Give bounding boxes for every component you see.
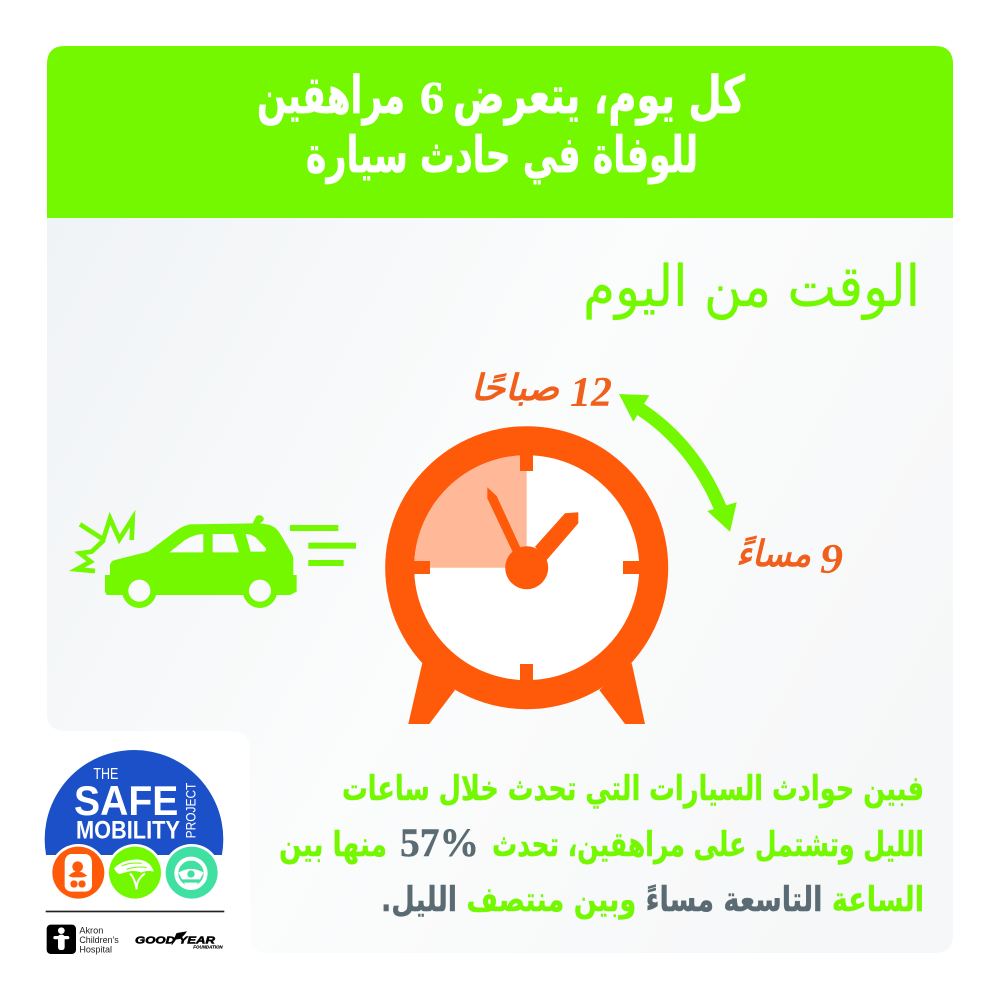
title: كل يوم، يتعرض [453, 66, 746, 126]
label: 12 am [471, 368, 612, 416]
logo: Akron Children's Hospital [47, 925, 119, 955]
logo wordmark: PROJECT [183, 782, 199, 838]
speed lines [290, 525, 356, 566]
impact burst [77, 518, 133, 571]
arrow: 12 am to 9 pm [619, 394, 737, 532]
logo: Goodyear Foundation: FOUNDATION [193, 944, 224, 949]
title: مراهقين [257, 66, 405, 126]
title: للوفاة في حادث سيارة [306, 126, 698, 185]
icon: crashing car [77, 515, 356, 608]
section heading: الوقت من اليوم [583, 254, 920, 320]
body text: 57% [400, 820, 479, 865]
label: 12 am: صباحًا [471, 368, 560, 409]
logo: Goodyear Foundation [135, 932, 224, 949]
logo: Akron Children's Hospital: Children's [79, 935, 119, 945]
clock ticks and hands [413, 455, 640, 681]
label: 9 pm [736, 534, 843, 583]
icon: alarm clock [400, 441, 654, 724]
body text [279, 769, 924, 920]
wheels and windows [128, 534, 271, 602]
logo divider [46, 911, 224, 912]
logo: Safe Mobility Project [45, 750, 224, 955]
shaded 9 to 12 sector [414, 455, 527, 568]
car body [105, 515, 297, 608]
logo wordmark: THE [93, 766, 118, 783]
logo: Akron Children's Hospital: Hospital [79, 945, 112, 955]
logo: Goodyear Foundation: GOOD YEAR [135, 935, 216, 946]
label: 12 am: 12 [570, 370, 612, 416]
label: 9 pm: مساءً [736, 534, 812, 575]
label: 9 pm: 9 [820, 537, 843, 583]
header band [47, 46, 953, 218]
logo: Akron Children's Hospital: Akron [79, 925, 103, 935]
logo wordmark: SAFE [74, 777, 178, 824]
body text: منها بين [279, 825, 387, 865]
clock legs [408, 663, 645, 724]
title [257, 66, 746, 185]
logo wordmark [74, 766, 199, 844]
icon: steering wheel [163, 844, 220, 901]
logo dome [44, 750, 224, 855]
logo wordmark: MOBILITY [76, 816, 180, 844]
title: 6 [420, 72, 444, 123]
body text: الساعة التاسعة مساءً وبين منتصف الليل. [381, 880, 924, 920]
clock face [400, 441, 654, 695]
icon: helmet [106, 844, 164, 901]
icon: car seat [50, 844, 107, 901]
